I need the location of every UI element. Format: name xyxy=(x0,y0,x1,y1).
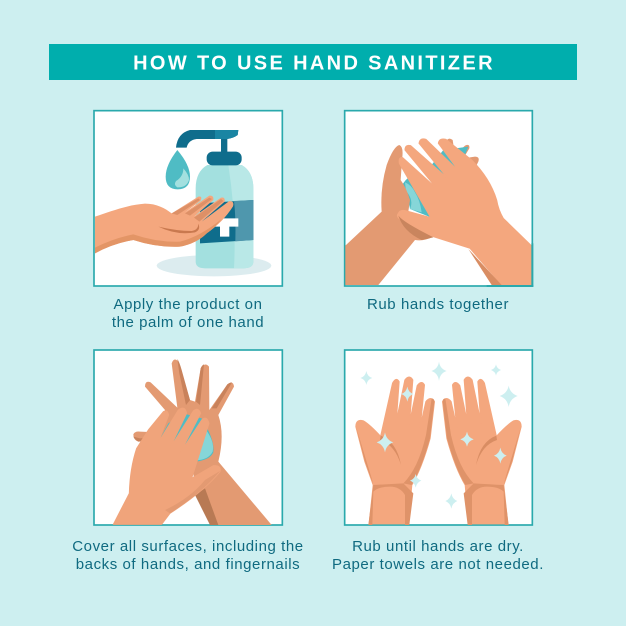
hand: front hand xyxy=(113,408,220,524)
hand: right hand xyxy=(443,377,521,525)
title banner: HOW TO USE HAND SANITIZER xyxy=(133,52,495,74)
hand: left hand xyxy=(356,377,434,525)
caption: step 3: backs of hands, and fingernails xyxy=(76,556,300,573)
back hand fingertips and sanitizer xyxy=(401,139,479,218)
caption: step 3: Cover all surfaces, including the xyxy=(72,538,304,555)
panel: rub hands xyxy=(345,111,533,287)
icon: sanitizer bottle xyxy=(176,130,253,268)
hand: back hand xyxy=(133,359,272,525)
sanitizer on palm xyxy=(157,413,214,462)
caption: step 1: the palm of one hand xyxy=(112,314,264,331)
caption: step 4: Rub until hands are dry. xyxy=(352,538,524,555)
caption: step 1: Apply the product on xyxy=(114,296,262,313)
title banner xyxy=(49,44,577,80)
hand: left back hand xyxy=(345,145,433,285)
icon: open hand xyxy=(95,196,233,253)
bottle shadow xyxy=(157,255,271,276)
icon: sparkles xyxy=(360,362,518,509)
caption: step 4: Paper towels are not needed. xyxy=(332,556,544,573)
icon: sanitizer drop xyxy=(166,150,190,189)
hand: right front hand xyxy=(397,139,533,287)
caption: step 2: Rub hands together xyxy=(367,296,509,313)
panel: apply product xyxy=(94,111,282,286)
panel: cover surfaces xyxy=(94,350,282,525)
panel: dry hands xyxy=(345,350,532,525)
